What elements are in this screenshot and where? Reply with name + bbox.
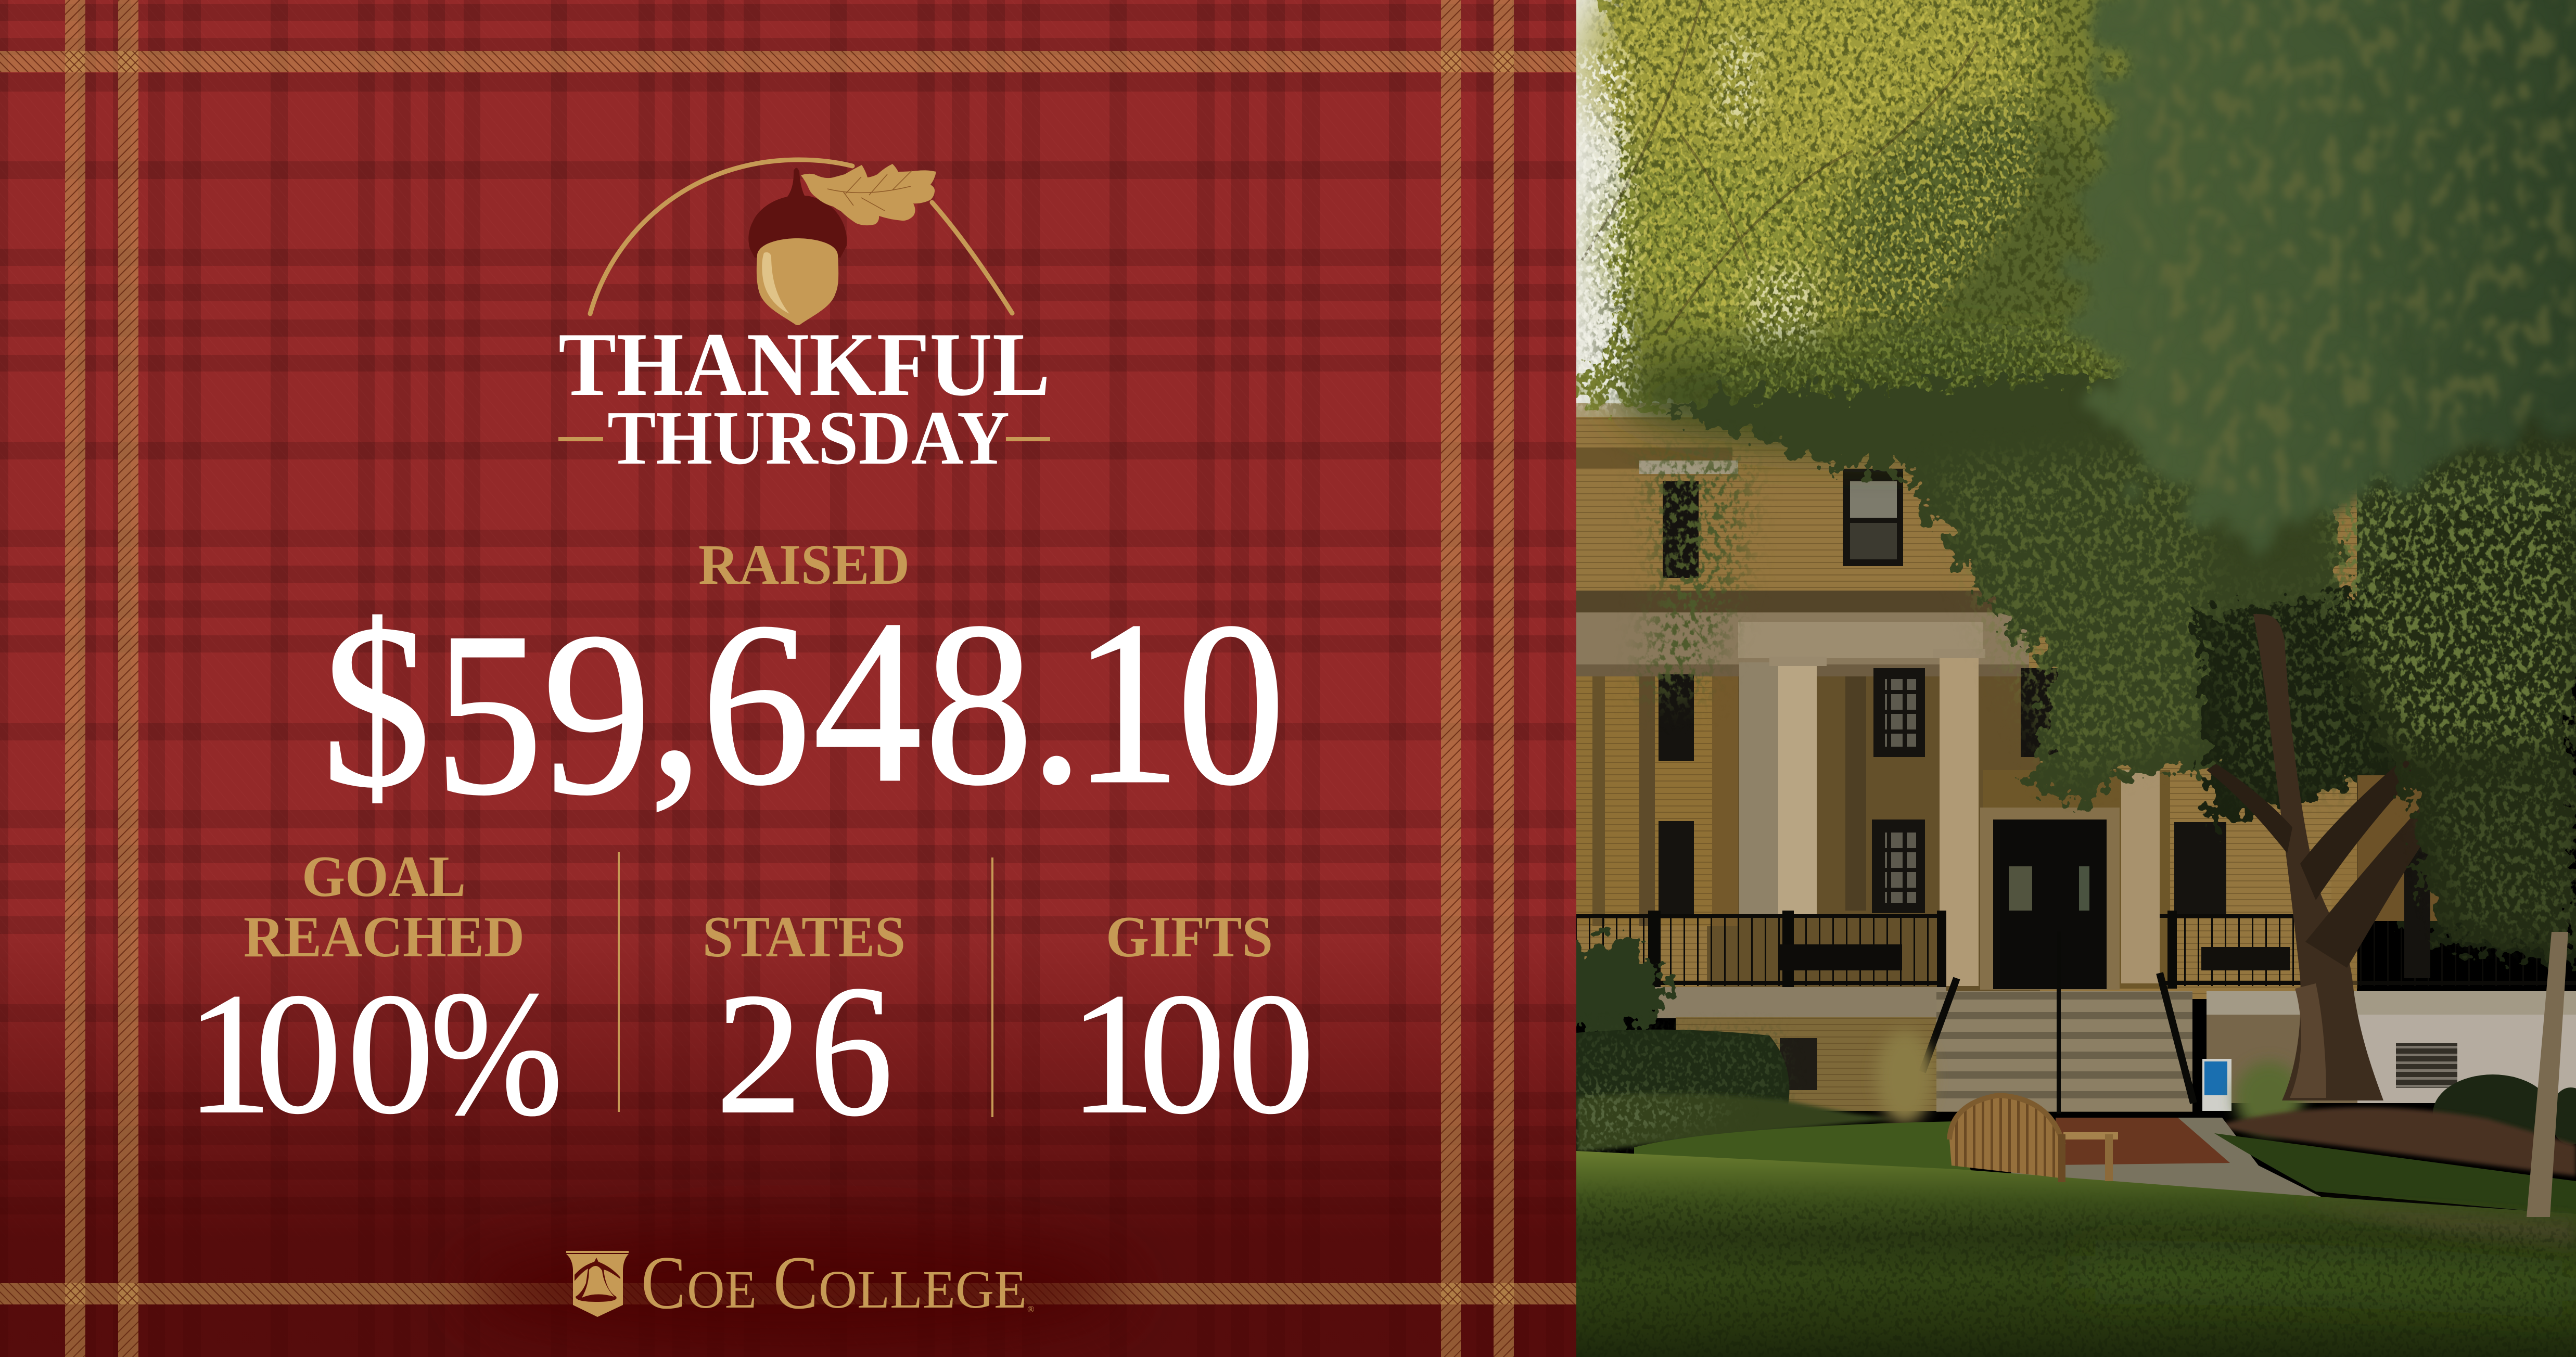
logo shadow glow [463,1233,1129,1348]
stat: 26 [716,947,893,1155]
label: GIFTS: GIFTS [1106,905,1273,969]
title flanking rule left [558,437,603,441]
logo: Coe College wordmark: OLLEGE [819,1260,1027,1320]
acorn highlight [762,252,789,314]
oak leaf [801,164,936,225]
logo: Coe College wordmark [641,1240,1035,1325]
title flanking rule right [1006,437,1050,441]
shrubs and flower beds [1551,939,2576,1176]
foreground lawn [1576,1151,2576,1357]
label: STATES: STATES [703,905,906,969]
amount raised: $59,648.10 [322,567,1285,843]
backdrop behind right foliage [2357,413,2576,673]
divider [991,857,993,1117]
back lawn and walkways [1634,1118,2576,1215]
stone foundation [1655,987,2576,1111]
central tree canopy [1644,364,2342,806]
front steps [1922,931,2231,1113]
upper left sunlit canopy [1576,0,2238,468]
stat: 26: 2 [716,957,802,1150]
columns [1739,649,2160,986]
panel: plaid background [0,0,1576,1357]
acorn cap [748,168,847,258]
stat: 100%: % [430,954,563,1153]
front door [1980,808,2120,990]
porch railings [1576,911,2576,989]
stat: 100: 100 [1069,957,1315,1150]
divider [618,852,620,1112]
arc right [932,202,1012,313]
building wall [1576,403,2357,999]
building windows [1659,469,2226,914]
label: RAISED: RAISED [698,533,910,596]
acorn nut [757,238,838,325]
sky [1576,0,1692,403]
logo: Coe College wordmark: OE [687,1260,757,1320]
logo: Coe College wordmark: C [641,1240,686,1325]
label: GOAL: GOAL [302,844,466,909]
leaf veins [827,171,912,211]
title: THANKFUL: THANKFUL [558,314,1050,415]
wooden bench [1949,1095,2118,1182]
shadow beneath canopy [2196,572,2576,968]
stat: 100% [186,954,563,1153]
arc left [590,160,852,314]
title: THURSDAY: THURSDAY [607,395,1010,481]
stat: 26: 6 [809,947,893,1155]
logo: Coe College wordmark: ® [1027,1304,1035,1314]
label: REACHED: REACHED [244,905,525,969]
right wing of building [2331,775,2451,989]
logo: Coe College wordmark: C [773,1240,818,1325]
panel: campus building photo [1551,0,2576,1357]
right foreground tree [2326,458,2576,1217]
stat: 100%: 100 [186,957,434,1150]
logo: Coe College shield [566,1251,629,1317]
large blurred foreground foliage [2079,0,2576,558]
icon: acorn with oak leaf and arc [590,160,1012,325]
tree trunk and branches [2207,614,2464,1100]
